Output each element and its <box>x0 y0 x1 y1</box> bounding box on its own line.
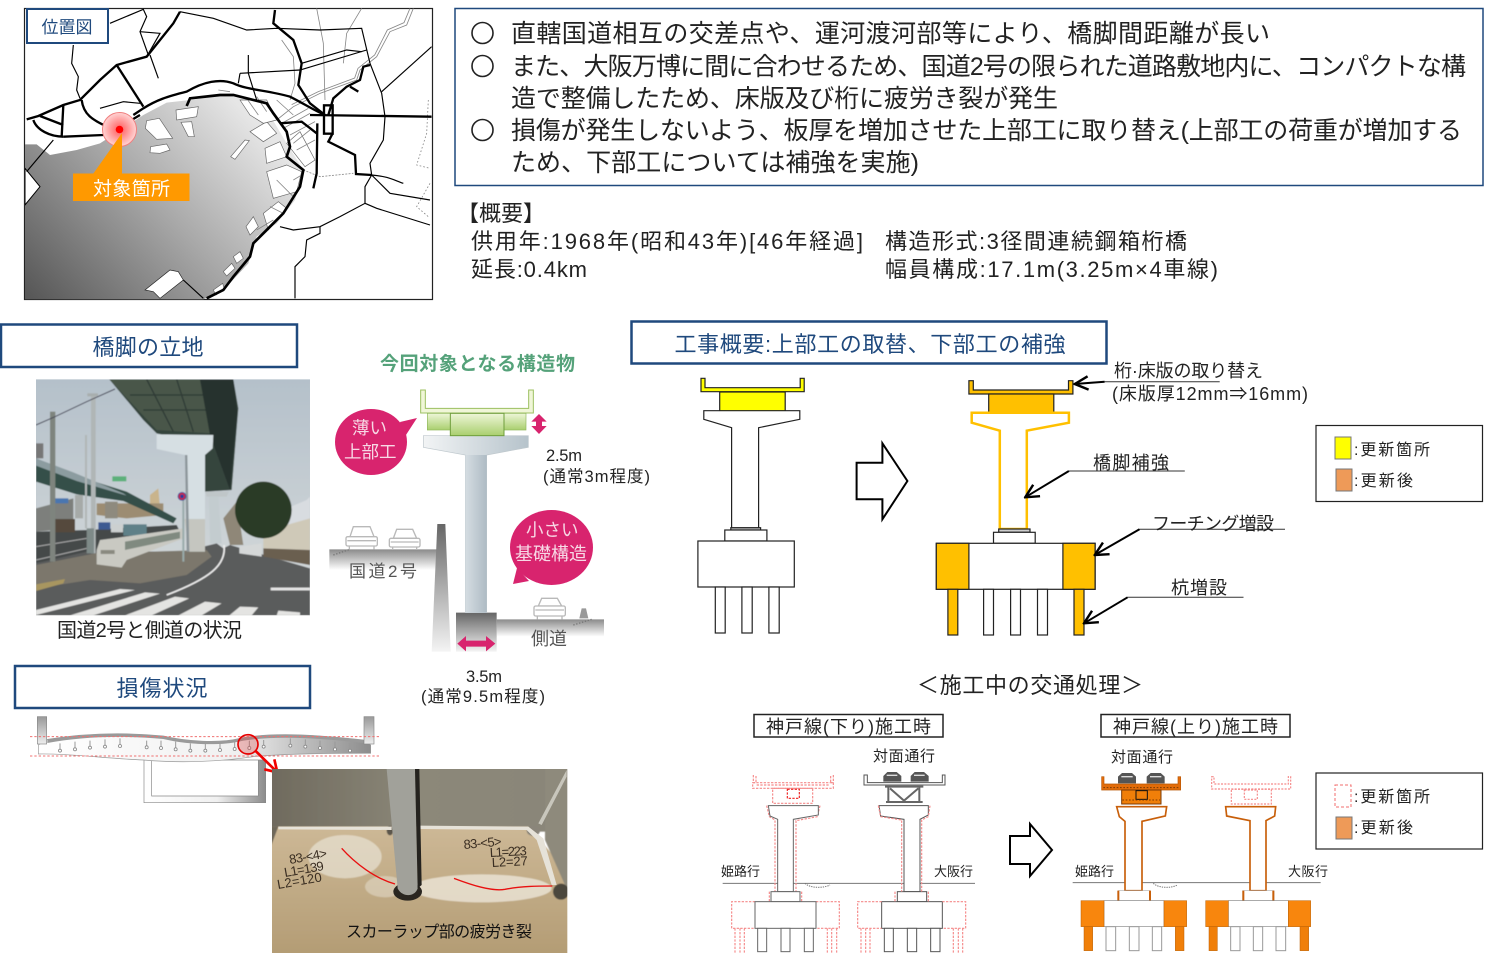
caption: スカーラップ部の疲労き裂: スカーラップ部の疲労き裂 <box>346 923 532 941</box>
overview text block <box>457 201 1218 282</box>
damaged deck section diagram <box>30 717 379 803</box>
label: 側道: 側道 <box>531 629 567 649</box>
callout: 杭増設: 杭増設 <box>1171 578 1227 598</box>
label box: 神戸線(上り)施工時: 神戸線(上り)施工時 <box>1113 717 1278 737</box>
overview text block: 延長:0.4km <box>471 257 587 282</box>
caption: 国道2号と側道の状況: 国道2号と側道の状況 <box>57 619 242 642</box>
label box: 神戸線(下り)施工時: 神戸線(下り)施工時 <box>766 717 931 737</box>
heading: 工事概要 <box>632 322 1106 364</box>
legend: construction: :更新後 <box>1354 472 1413 490</box>
label: 大阪行: 大阪行 <box>934 864 973 879</box>
heading: 損傷状況: 損傷状況 <box>116 676 208 701</box>
photo: fatigue cracks at scallop <box>268 765 572 953</box>
dimension: 3.5m: (通常9.5m程度) <box>421 687 545 706</box>
dimension: 2.5m <box>543 447 650 486</box>
diagram: existing pier <box>698 378 804 633</box>
map marker: target location <box>102 112 136 146</box>
heading: 位置図 <box>27 9 108 43</box>
handwritten marks on photo: L2=27 <box>491 853 528 870</box>
label: 姫路行: 姫路行 <box>1075 864 1114 879</box>
legend: traffic stages <box>1316 773 1482 849</box>
label: 対面通行: 対面通行 <box>1111 749 1173 766</box>
summary text box: 損傷が発生しないよう、板厚を増加させた上部工に取り替え(上部工の荷重が増加する <box>511 117 1462 145</box>
overview text block: 供用年:1968年(昭和43年)[46年経過] <box>471 229 863 254</box>
summary text box: 造で整備したため、床版及び桁に疲労き裂が発生 <box>511 85 1058 113</box>
legend: traffic stages: :更新後 <box>1354 819 1413 837</box>
handwritten marks on photo: 83-<5> <box>463 834 502 852</box>
callout: 対象箇所: 対象箇所 <box>93 178 170 200</box>
summary text box: 直轄国道相互の交差点や、運河渡河部等により、橋脚間距離が長い <box>511 20 1270 48</box>
label: 対面通行: 対面通行 <box>873 748 935 765</box>
label: 姫路行: 姫路行 <box>721 864 760 879</box>
summary text box: また、大阪万博に間に合わせるため、国道2号の限られた道路敷地内に、コンパクトな構 <box>511 53 1466 81</box>
dimension: 3.5m <box>421 668 545 706</box>
handwritten marks on photo: L1=223 <box>489 843 527 860</box>
callout: 橋脚補強: 橋脚補強 <box>1093 453 1169 473</box>
callout: 桁・床版の取り替え: (床版厚12mm⇒16mm) <box>1112 384 1308 404</box>
callout: 桁・床版の取り替え <box>1075 361 1308 404</box>
bubble: 薄い上部工: 薄い <box>352 418 387 438</box>
callout: 対象箇所 <box>73 133 190 201</box>
handwritten marks on photo: L2=120 <box>276 869 323 892</box>
map: bay and road network <box>25 8 432 299</box>
dimension: 2.5m: 2.5m <box>546 447 582 465</box>
overview text block: 幅員構成:17.1m(3.25m×4車線) <box>885 257 1218 282</box>
overview text block: 【概要】 <box>457 201 545 226</box>
heading: 位置図: 位置図 <box>42 18 92 37</box>
piers: down-line stage <box>723 772 975 953</box>
legend: construction: :更新箇所 <box>1354 441 1430 459</box>
callout: フーチング増設 <box>1095 514 1285 555</box>
structure drawing <box>329 390 604 652</box>
structure cross-section figure <box>329 353 650 706</box>
handwritten marks on photo: L1=139 <box>283 858 325 880</box>
heading: 工事概要: 工事概要:上部工の取替、下部工の補強 <box>674 332 1066 357</box>
bubble: 小さい基礎構造: 小さい <box>526 520 578 540</box>
heading: 施工中の交通処理: ＜施工中の交通処理＞ <box>917 673 1143 698</box>
legend: construction <box>1316 426 1482 502</box>
heading: 橋脚の立地 <box>1 324 297 367</box>
diagram: reinforced pier <box>936 381 1095 635</box>
bubble: 小さい基礎構造 <box>510 510 593 585</box>
callout: 桁・床版の取り替え: 桁·床版の取り替え <box>1114 361 1263 381</box>
piers: up-line stage <box>1073 773 1321 951</box>
figure title: 今回対象となる構造物 <box>380 353 575 375</box>
bubble: 薄い上部工 <box>335 409 417 475</box>
location map panel <box>24 8 432 299</box>
diagram: Kobe line up construction <box>1073 749 1328 951</box>
arrow: before to after <box>857 443 907 519</box>
callout: 橋脚補強 <box>1025 453 1185 497</box>
handwritten marks on photo: 83-<4> <box>288 846 328 867</box>
photo: road and side road under viaduct <box>33 377 313 618</box>
callout: 杭増設 <box>1084 578 1244 623</box>
overview text block: 構造形式:3径間連続鋼箱桁橋 <box>885 229 1187 254</box>
legend: traffic stages: :更新箇所 <box>1354 788 1430 806</box>
heading: 損傷状況 <box>15 666 310 708</box>
dimension: 2.5m: (通常3m程度) <box>543 467 650 486</box>
bubble: 薄い上部工: 上部工 <box>344 442 396 462</box>
heading: 橋脚の立地: 橋脚の立地 <box>92 335 204 360</box>
arrow: stage transition <box>1010 824 1052 876</box>
bubble: 小さい基礎構造: 基礎構造 <box>515 544 587 564</box>
summary text box: ため、下部工については補強を実施) <box>511 149 919 177</box>
summary text box <box>455 8 1483 186</box>
dimension: 3.5m: 3.5m <box>466 668 502 686</box>
handwritten marks on photo <box>276 834 528 892</box>
callout: フーチング増設: フーチング増設 <box>1152 514 1274 534</box>
diagram: Kobe line down construction <box>721 748 975 953</box>
label: 国道2号: 国道2号 <box>349 562 417 581</box>
label: 大阪行: 大阪行 <box>1288 864 1328 879</box>
